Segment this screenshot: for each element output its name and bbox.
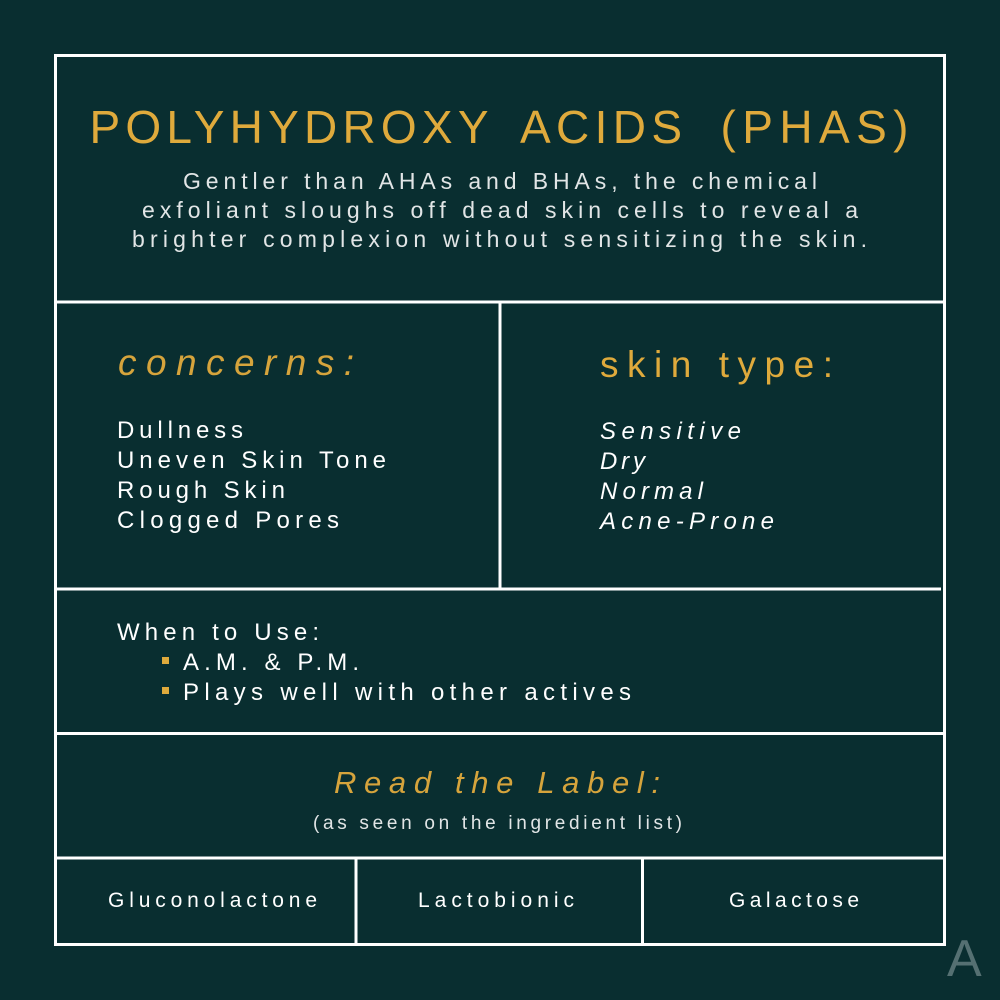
intro text: brighter complexion without sensitizing the skin. (132, 226, 867, 252)
bullet list (162, 649, 631, 706)
bullet list: A.M. & P.M. (183, 649, 359, 676)
ingredient: Gluconolactone: Gluconolactone (108, 889, 317, 912)
concerns list: Dullness (117, 417, 243, 444)
title: ACIDS (520, 101, 682, 153)
ingredient: Galactose: Galactose (729, 889, 859, 912)
title: (PHAS) (720, 101, 908, 153)
skin type list: Sensitive (600, 418, 741, 445)
frame and grid lines (55, 56, 945, 945)
intro text: Gentler than AHAs and BHAs, the chemical (183, 168, 817, 194)
skin type heading: skin type: (600, 344, 833, 385)
concerns heading: concerns: (118, 342, 354, 383)
title (90, 101, 908, 153)
skin type list (598, 418, 774, 535)
intro text (132, 168, 867, 252)
intro text: exfoliant sloughs off dead skin cells to reveal a (142, 197, 858, 223)
read the label subtext: (as seen on the ingredient list) (313, 813, 682, 834)
concerns list (117, 417, 386, 534)
concerns list: Uneven Skin Tone (117, 447, 386, 474)
logo mark: A (947, 930, 982, 988)
read the label heading: Read the Label: (334, 765, 660, 800)
skin type list: Dry (600, 448, 647, 475)
panel: concerns (117, 342, 386, 534)
skin type list: Normal (600, 478, 704, 505)
title: POLYHYDROXY (90, 101, 488, 153)
bullet list: Plays well with other actives (183, 679, 631, 706)
concerns list: Rough Skin (117, 477, 285, 504)
panel: skin type (598, 344, 833, 535)
skin type list: Acne-Prone (598, 508, 774, 535)
ingredient: Lactobionic: Lactobionic (418, 889, 574, 912)
panel: when to use (117, 619, 631, 706)
panel: read the label (313, 765, 682, 834)
when to use heading: When to Use: (117, 619, 319, 646)
concerns list: Clogged Pores (117, 507, 339, 534)
